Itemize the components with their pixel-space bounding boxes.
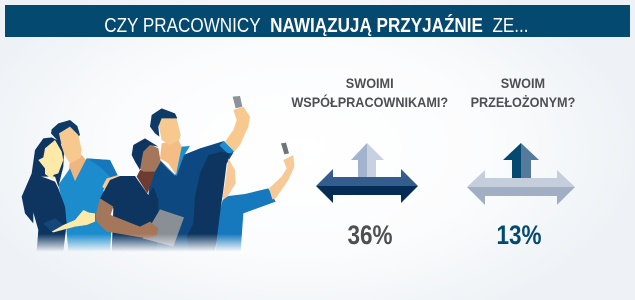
man in light blue shirt xyxy=(51,120,118,252)
title banner: CZY PRACOWNICY NAWIĄZUJĄ PRZYJAŹNIE ZE... xyxy=(104,14,529,37)
icon: coworkers arrows xyxy=(316,143,418,203)
label: coworkers: WSPÓŁPRACOWNIKAMI? xyxy=(292,94,448,110)
man taking a selfie with phone xyxy=(148,96,250,252)
label: coworkers xyxy=(291,75,448,110)
icon: supervisor arrows xyxy=(467,143,575,205)
tablet xyxy=(143,209,184,247)
label: supervisor xyxy=(471,75,575,110)
value: 13%: 13% xyxy=(496,220,542,250)
label: supervisor: SWOIM xyxy=(501,75,545,91)
woman on the right with phone xyxy=(187,143,294,252)
title banner xyxy=(5,5,630,37)
label: supervisor: PRZEŁOŻONYM? xyxy=(471,94,575,110)
label: coworkers: SWOIMI xyxy=(346,75,394,91)
woman on the left xyxy=(22,137,95,252)
value: 36%: 36% xyxy=(347,220,393,250)
illustration: group of colleagues taking selfies xyxy=(22,96,294,251)
man with tablet xyxy=(96,138,184,252)
